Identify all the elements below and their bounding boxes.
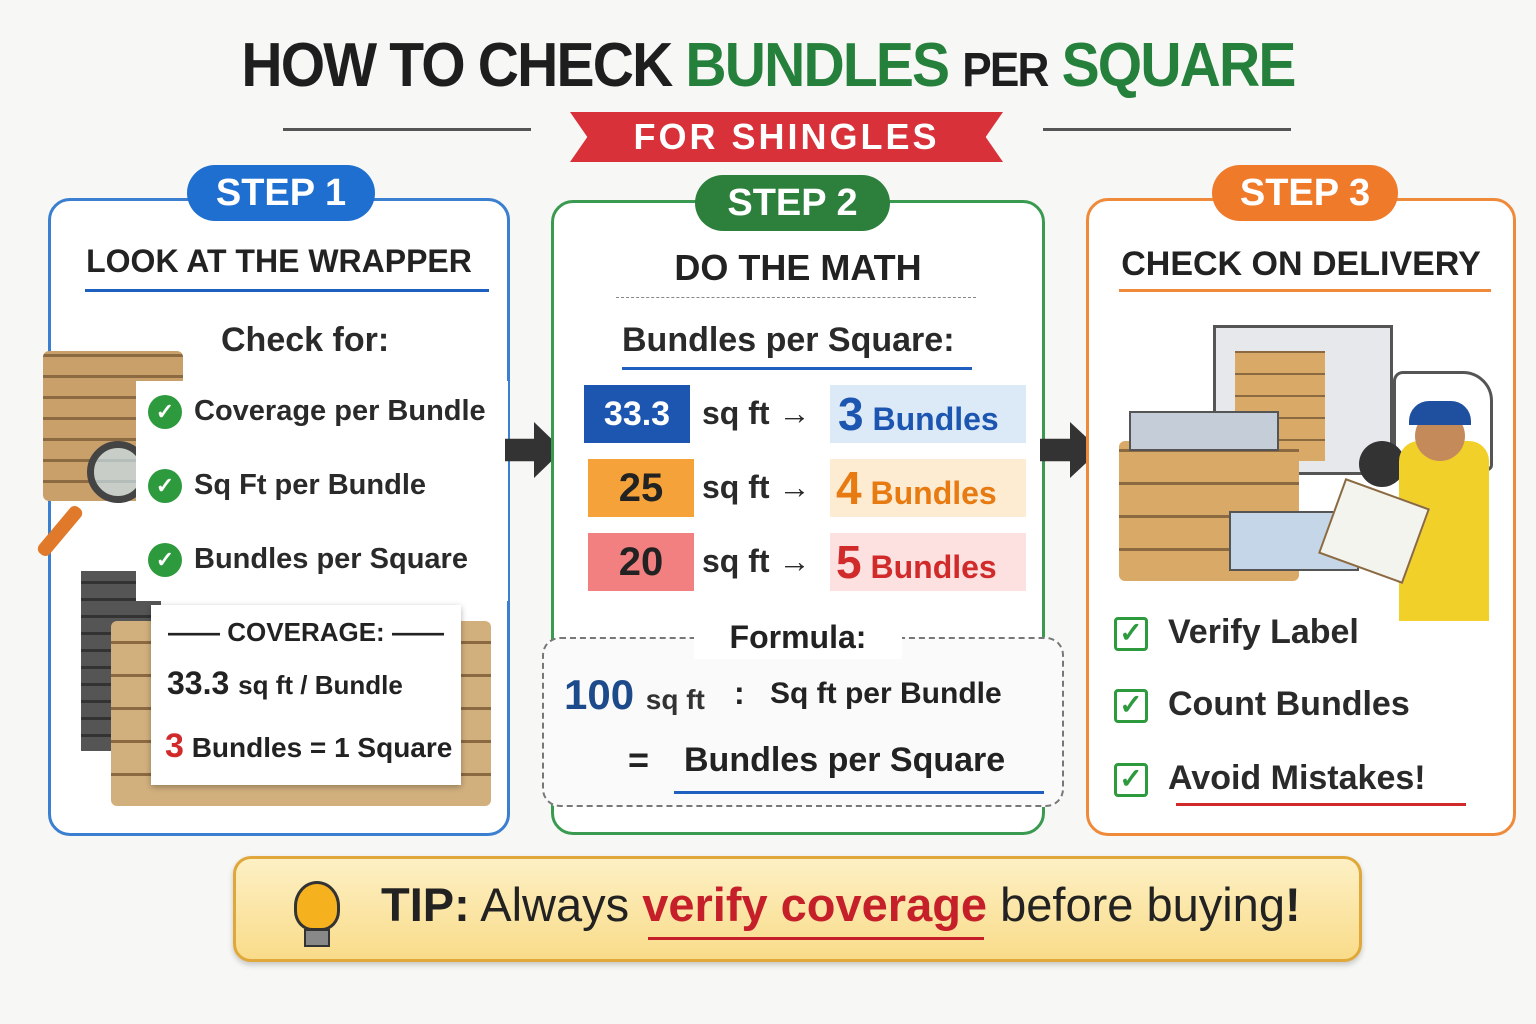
- formula box: Formula:: [730, 619, 866, 655]
- label card: coverage: —— COVERAGE: ——: [168, 617, 444, 647]
- formula box: Bundles per Square: [684, 741, 1005, 779]
- checklist: delivery: Count Bundles: [1168, 685, 1410, 723]
- title: HOW TO CHECK BUNDLES PER SQUARE: [241, 31, 1295, 100]
- checklist: ✓: [156, 473, 174, 498]
- label card: coverage: 33.3 sq ft / Bundle: [167, 665, 403, 701]
- row 33.3: sq ft →: [702, 395, 810, 431]
- label card: coverage: 3 Bundles = 1 Square: [165, 727, 452, 765]
- row 25: 25: [619, 466, 663, 510]
- icon: magnifier: [87, 441, 149, 503]
- checklist: Coverage per Bundle: [194, 395, 486, 427]
- checklist: ✓: [156, 547, 174, 572]
- formula box: =: [628, 739, 649, 780]
- checklist: delivery: ✓: [1119, 763, 1143, 794]
- checklist: delivery: [1114, 613, 1466, 806]
- heading: look at wrapper: LOOK AT THE WRAPPER: [86, 243, 472, 279]
- row 20: 20: [619, 540, 663, 584]
- text: check for: Check for:: [221, 321, 389, 359]
- checklist: delivery: Verify Label: [1168, 613, 1359, 651]
- text: bundles per square: Bundles per Square:: [622, 321, 955, 359]
- label card: coverage: [151, 605, 461, 785]
- badge: step 2: STEP 2: [727, 182, 858, 224]
- checklist: delivery: Avoid Mistakes!: [1168, 759, 1426, 797]
- panel: step 2: [551, 200, 1045, 835]
- illustration: delivery truck and worker: [1119, 325, 1493, 621]
- tip text: TIP: Always verify coverage before buying!: [381, 878, 1301, 931]
- row 25: [588, 459, 1026, 517]
- row 25: 4 Bundles: [836, 462, 997, 514]
- row 33.3: 33.3: [604, 395, 670, 433]
- arrow: 1 to 2: [505, 422, 551, 478]
- row 33.3: [584, 385, 1026, 443]
- formula box: :: [734, 675, 745, 711]
- panel: step 1: [48, 198, 510, 836]
- badge: step 1: [187, 165, 375, 221]
- heading: check on delivery: CHECK ON DELIVERY: [1121, 245, 1481, 283]
- checklist: delivery: ✓: [1119, 617, 1143, 648]
- badge: step 2: [695, 175, 890, 231]
- formula box: 100 sq ft: [564, 671, 705, 718]
- subtitle ribbon: FOR SHINGLES: [633, 116, 940, 157]
- tip box: [233, 856, 1362, 962]
- row 20: 5 Bundles: [836, 536, 997, 588]
- checklist: ✓: [156, 399, 174, 424]
- subtitle ribbon: [570, 112, 1003, 162]
- checklist: Bundles per Square: [194, 543, 468, 575]
- row 20: sq ft →: [702, 543, 810, 579]
- badge: step 3: [1212, 165, 1398, 221]
- row 33.3: 3 Bundles: [838, 388, 999, 440]
- icon: lightbulb: [294, 881, 340, 931]
- heading: do the math: DO THE MATH: [674, 247, 922, 288]
- badge: step 3: STEP 3: [1240, 172, 1370, 214]
- badge: step 1: STEP 1: [216, 172, 346, 214]
- checklist: [136, 381, 508, 601]
- icon: shingle bundles stack: [43, 351, 183, 501]
- row 20: [588, 533, 1026, 591]
- checklist: delivery: ✓: [1119, 689, 1143, 720]
- formula box: [542, 637, 1064, 807]
- arrow: 2 to 3: [1040, 422, 1086, 478]
- row 25: sq ft →: [702, 469, 810, 505]
- panel: step 3: [1086, 198, 1516, 836]
- formula box: Sq ft per Bundle: [770, 677, 1002, 710]
- checklist: Sq Ft per Bundle: [194, 469, 426, 501]
